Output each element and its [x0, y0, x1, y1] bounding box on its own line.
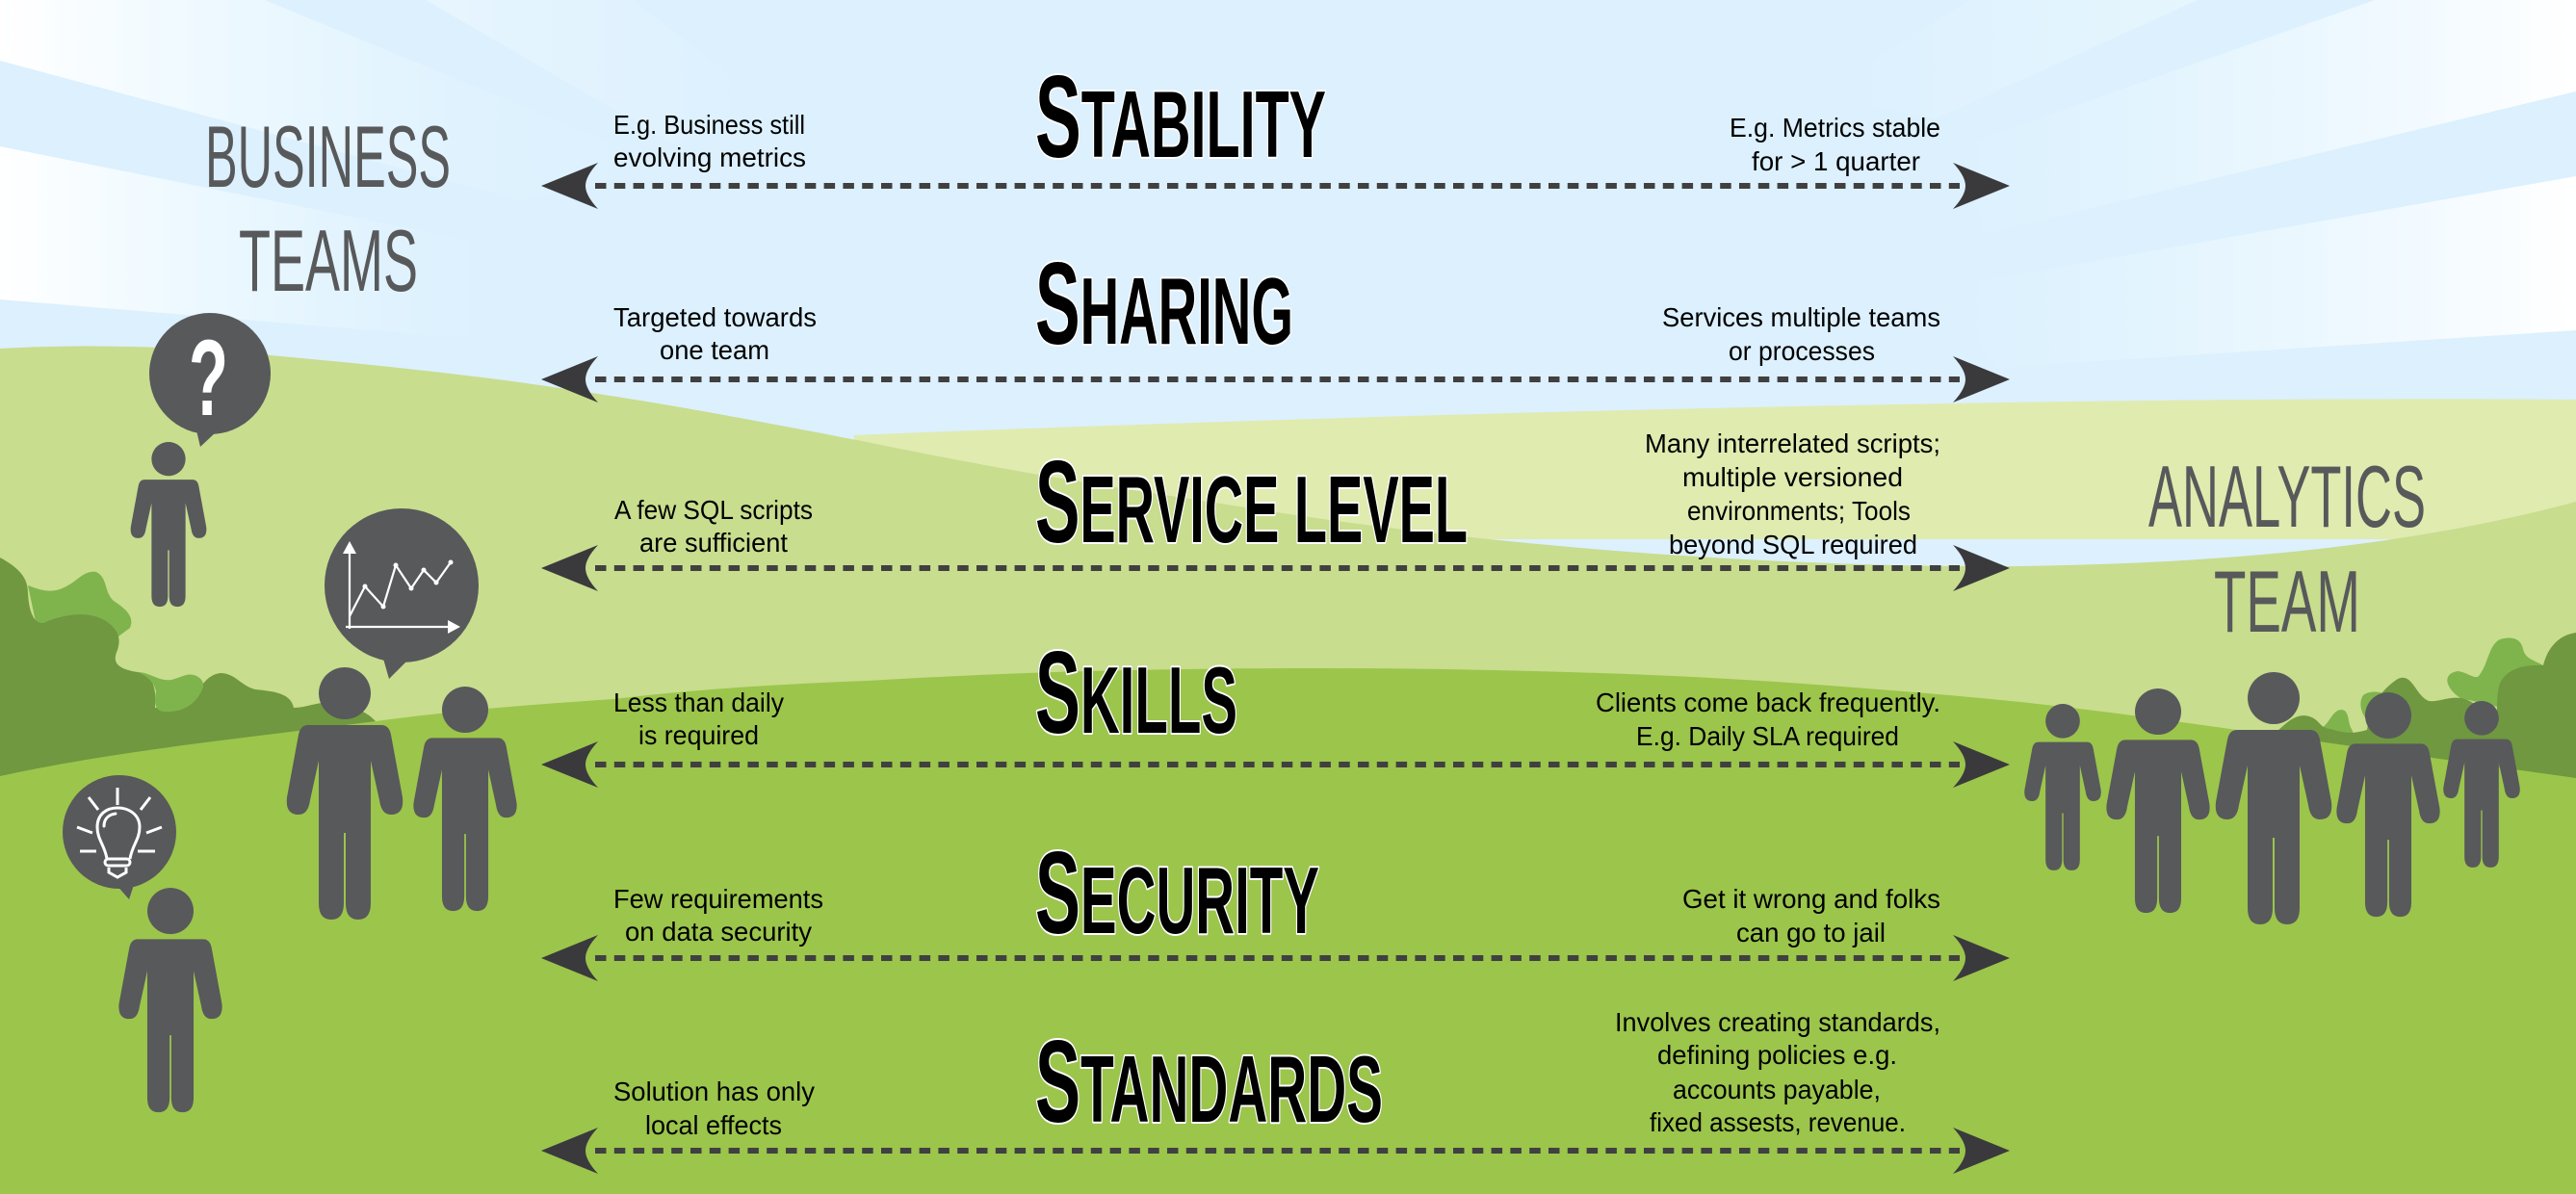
title: stability: STABILITY — [1035, 51, 1326, 182]
text: standards right: defining policies e.g. — [1657, 1040, 1897, 1070]
text: sharing right: or processes — [1729, 336, 1875, 366]
text: standards right: accounts payable, — [1673, 1075, 1881, 1104]
person: analytics 1 — [2024, 704, 2101, 870]
text: skills left — [613, 688, 784, 750]
text: service level left — [614, 495, 813, 558]
heading: business teams: BUSINESS — [205, 109, 451, 206]
text: sharing right — [1662, 302, 1940, 366]
arrow: skills — [541, 741, 2010, 788]
text: security left: on data security — [625, 917, 812, 947]
speech bubble: lightbulb — [63, 775, 176, 899]
speech bubble: chart — [325, 508, 479, 679]
text: service level right: Many interrelated scripts; — [1645, 428, 1940, 458]
arrow: standards — [541, 1128, 2010, 1174]
text: service level left: are sufficient — [639, 528, 788, 558]
text: security right: can go to jail — [1736, 918, 1886, 947]
text: stability left — [613, 110, 806, 172]
text: service level right — [1645, 428, 1940, 559]
text: stability left: evolving metrics — [613, 143, 806, 172]
heading: analytics team — [2148, 449, 2426, 651]
text: security left — [613, 884, 823, 947]
text: sharing left — [613, 302, 817, 365]
text: service level left: A few SQL scripts — [614, 495, 813, 525]
arrow: sharing — [541, 356, 2010, 402]
arrow: security — [541, 935, 2010, 981]
text: skills left: Less than daily — [613, 688, 784, 717]
row: standards — [541, 1007, 2010, 1174]
person: analytics 2 — [2106, 688, 2210, 913]
title: security: SECURITY — [1035, 827, 1319, 958]
text: skills right — [1596, 688, 1940, 751]
text: standards right: Involves creating standards, — [1615, 1007, 1940, 1037]
speech bubble: question — [149, 313, 271, 447]
person: business 3 — [413, 687, 517, 911]
title: standards: STANDARDS — [1035, 1016, 1383, 1147]
heading: business teams: TEAMS — [239, 213, 418, 310]
title: skills: SKILLS — [1035, 627, 1237, 758]
heading: analytics team: TEAM — [2214, 554, 2360, 651]
person: analytics 3 — [2216, 672, 2331, 924]
person: analytics 4 — [2336, 692, 2440, 917]
text: sharing right: Services multiple teams — [1662, 302, 1940, 332]
person: business 4 — [118, 888, 222, 1112]
row: security — [541, 827, 2010, 981]
arrow: stability — [541, 163, 2010, 209]
text: security right: Get it wrong and folks — [1682, 884, 1940, 914]
title: service level: SERVICE LEVEL — [1035, 436, 1468, 567]
text: standards right: fixed assests, revenue. — [1650, 1107, 1906, 1137]
person: business 2 — [287, 667, 403, 920]
speech bubble: question: ? — [189, 318, 228, 438]
text: stability right: for > 1 quarter — [1752, 146, 1920, 176]
text: standards left: local effects — [645, 1110, 782, 1140]
text: skills right: E.g. Daily SLA required — [1636, 721, 1899, 751]
bushes right — [2277, 633, 2576, 818]
arrow: service level — [541, 545, 2010, 591]
text: stability left: E.g. Business still — [613, 110, 805, 140]
text: sharing left: Targeted towards — [613, 302, 817, 332]
row: skills — [541, 627, 2010, 788]
person: business 1 — [131, 442, 206, 607]
text: skills right: Clients come back frequently. — [1596, 688, 1940, 717]
text: service level right: environments; Tools — [1687, 496, 1911, 526]
row: service level — [541, 428, 2010, 591]
text: sharing left: one team — [660, 335, 769, 365]
text: standards right — [1615, 1007, 1940, 1137]
bushes left — [0, 558, 385, 799]
text: standards left — [613, 1077, 815, 1140]
row: stability — [541, 51, 2010, 209]
text: skills left: is required — [638, 720, 759, 750]
text: security right — [1682, 884, 1940, 947]
text: stability right: E.g. Metrics stable — [1730, 113, 1940, 143]
title: sharing: SHARING — [1035, 238, 1293, 369]
person: analytics 5 — [2443, 701, 2520, 868]
text: service level right: multiple versioned — [1682, 462, 1903, 492]
text: security left: Few requirements — [613, 884, 823, 914]
row: sharing — [541, 238, 2010, 402]
text: standards left: Solution has only — [613, 1077, 815, 1106]
hills — [0, 347, 2576, 1194]
text: stability right — [1730, 113, 1940, 176]
heading: business teams — [205, 109, 451, 310]
text: service level right: beyond SQL required — [1669, 530, 1917, 559]
